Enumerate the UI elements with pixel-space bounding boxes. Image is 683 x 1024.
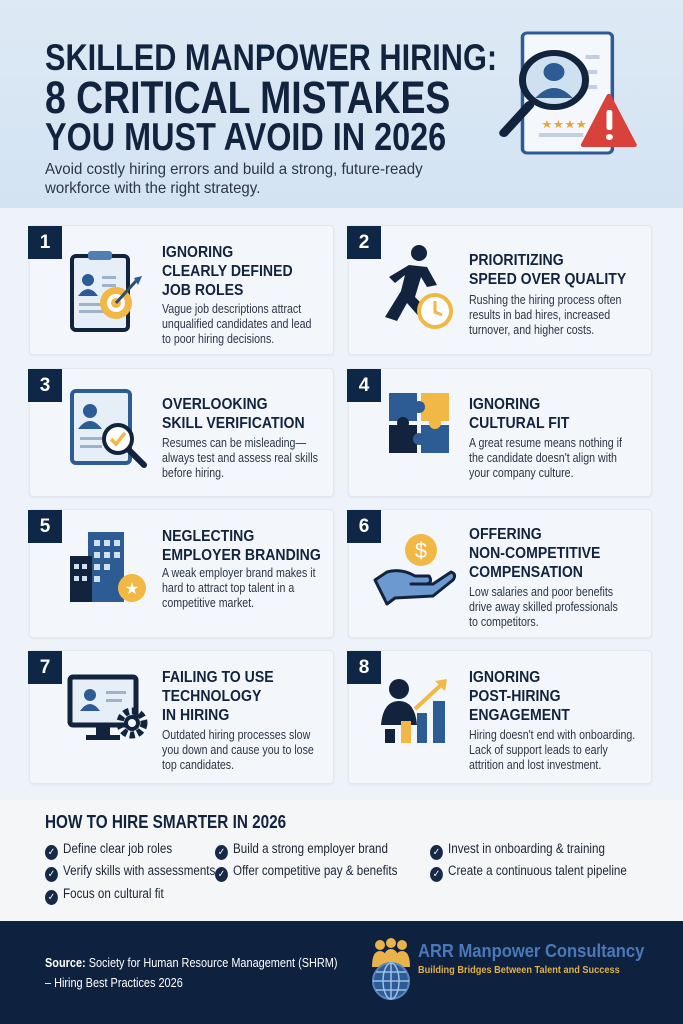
panel: 4 (348, 368, 652, 497)
icon: building star: ★ (125, 579, 139, 598)
icon: resume magnifier warning: ★★★★ (541, 118, 587, 131)
text: your company culture. (469, 466, 574, 480)
subtitle: Avoid costly hiring errors and build a strong, future-ready (45, 161, 423, 178)
heading: IGNORING (469, 669, 540, 686)
checklist: Create a continuous talent pipeline (448, 863, 627, 878)
text: to poor hiring decisions. (162, 332, 274, 346)
panel: 2: 2 (359, 232, 369, 253)
heading: JOB ROLES (162, 282, 243, 299)
heading: ENGAGEMENT (469, 707, 570, 724)
heading (162, 396, 305, 432)
checklist: Invest in onboarding & training (448, 841, 605, 856)
heading (469, 396, 570, 432)
source text: Source: Society for Human Resource Management (SHRM) (45, 955, 338, 970)
checklist: ✓ (433, 847, 440, 858)
text: turnover, and higher costs. (469, 323, 594, 337)
footer (0, 921, 683, 1024)
heading: TECHNOLOGY (162, 688, 261, 705)
subtitle: workforce with the right strategy. (45, 180, 260, 197)
heading: SPEED OVER QUALITY (469, 271, 626, 288)
checklist: Verify skills with assessments (63, 863, 215, 878)
subtitle (45, 161, 423, 197)
text (469, 728, 635, 772)
heading: CLEARLY DEFINED (162, 263, 293, 280)
heading: NON-COMPETITIVE (469, 545, 600, 562)
panel: 3 (29, 368, 334, 497)
title: 8 CRITICAL MISTAKES (45, 72, 450, 123)
source text (45, 955, 338, 990)
text (162, 728, 314, 772)
source text: – Hiring Best Practices 2026 (45, 975, 183, 990)
text: hard to attract top talent in a (162, 581, 294, 595)
title (45, 37, 497, 159)
text: Rushing the hiring process often (469, 293, 621, 307)
text (162, 302, 311, 346)
panel: 6: 6 (359, 516, 369, 537)
panel: how to hire smarter (0, 800, 683, 921)
heading: FAILING TO USE (162, 669, 274, 686)
logo text (418, 941, 644, 976)
panel: 3: 3 (40, 375, 50, 396)
checklist: ✓ (48, 847, 55, 858)
checklist: ✓ (218, 869, 225, 880)
icon: building star (70, 532, 146, 602)
text: results in bad hires, increased (469, 308, 610, 322)
header background (0, 0, 683, 208)
text: Resumes can be misleading— (162, 436, 306, 450)
heading (469, 526, 600, 581)
text: competitive market. (162, 596, 254, 610)
heading (162, 669, 274, 724)
text: always test and assess real skills (162, 451, 318, 465)
logo icon (372, 938, 410, 1000)
icon: resume magnifier warning (499, 32, 637, 154)
text (469, 585, 618, 629)
checklist (45, 841, 627, 905)
checklist: ✓ (218, 847, 225, 858)
heading: EMPLOYER BRANDING (162, 547, 321, 564)
heading: IGNORING (469, 396, 540, 413)
text: Outdated hiring processes slow (162, 728, 310, 742)
panel: 1 (29, 225, 334, 355)
panel: 7 (29, 650, 334, 784)
icon: runner clock (385, 245, 453, 329)
icon: hand coin (374, 534, 456, 606)
panel: 7: 7 (40, 657, 50, 678)
text (162, 436, 318, 480)
heading (469, 252, 626, 288)
icon: monitor gear (68, 674, 148, 740)
heading: PRIORITIZING (469, 252, 564, 269)
text: Lack of support leads to early (469, 743, 608, 757)
heading (162, 528, 321, 564)
checklist: Focus on cultural fit (63, 886, 164, 901)
heading: SKILL VERIFICATION (162, 415, 305, 432)
checklist: Define clear job roles (63, 841, 172, 856)
heading: IN HIRING (162, 707, 229, 724)
text: attrition and lost investment. (469, 758, 601, 772)
title: SKILLED MANPOWER HIRING: (45, 37, 497, 78)
panel: 1: 1 (40, 232, 50, 253)
icon: clipboard target (70, 251, 142, 332)
text: Low salaries and poor benefits (469, 585, 613, 599)
text (469, 436, 622, 480)
text: you down and cause you to lose (162, 743, 314, 757)
text (469, 293, 621, 337)
checklist: ✓ (433, 869, 440, 880)
heading: NEGLECTING (162, 528, 254, 545)
text: top candidates. (162, 758, 234, 772)
heading: HOW TO HIRE SMARTER IN 2026 (45, 812, 286, 832)
icon: resume magnifier (70, 389, 147, 468)
icon: puzzle (389, 393, 449, 453)
heading: POST-HIRING (469, 688, 561, 705)
icon: person growth chart (381, 679, 447, 743)
heading: OFFERING (469, 526, 542, 543)
title: YOU MUST AVOID IN 2026 (45, 116, 446, 159)
heading (162, 244, 293, 299)
text: A weak employer brand makes it (162, 566, 316, 580)
text: A great resume means nothing if (469, 436, 622, 450)
panel: 6 (348, 509, 652, 638)
heading: OVERLOOKING (162, 396, 268, 413)
panel: 5: 5 (40, 516, 50, 537)
checklist: Offer competitive pay & benefits (233, 863, 397, 878)
text (162, 566, 316, 610)
heading: CULTURAL FIT (469, 415, 569, 432)
logo text: Building Bridges Between Talent and Success (418, 965, 620, 976)
icon: hand coin: $ (415, 538, 427, 563)
text: the candidate doesn't align with (469, 451, 617, 465)
checklist: Build a strong employer brand (233, 841, 388, 856)
text: to competitors. (469, 615, 539, 629)
text: drive away skilled professionals (469, 600, 618, 614)
panel: 2 (348, 225, 652, 355)
checklist: ✓ (48, 892, 55, 903)
text: Vague job descriptions attract (162, 302, 301, 316)
heading: COMPENSATION (469, 564, 583, 581)
text: unqualified candidates and lead (162, 317, 311, 331)
panel: 8: 8 (359, 657, 369, 678)
panel: 4: 4 (359, 375, 369, 396)
panel: 5 (29, 509, 334, 638)
logo text: ARR Manpower Consultancy (418, 941, 644, 961)
text: before hiring. (162, 466, 224, 480)
panel: 8 (348, 650, 652, 784)
text: Hiring doesn't end with onboarding. (469, 728, 635, 742)
heading: IGNORING (162, 244, 233, 261)
checklist: ✓ (48, 869, 55, 880)
heading (469, 669, 570, 724)
